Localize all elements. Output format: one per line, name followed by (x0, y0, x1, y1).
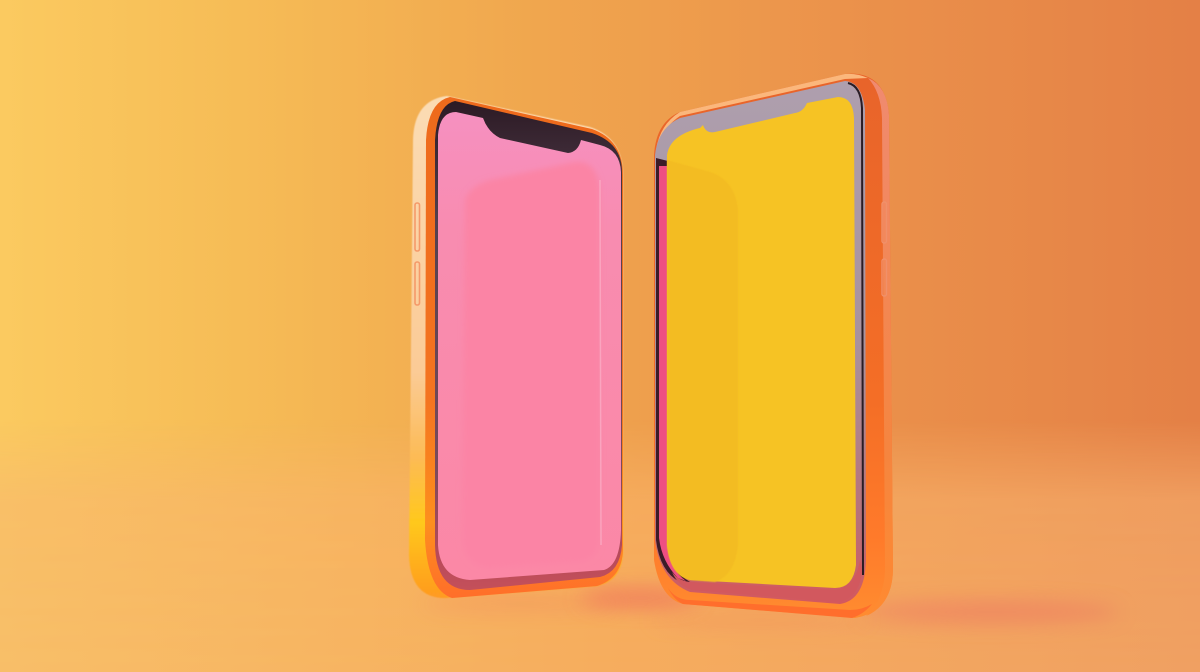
right phone lower red band (672, 560, 862, 602)
left phone body (409, 96, 623, 598)
right phone (654, 74, 893, 618)
right phone bottom rim (668, 588, 872, 618)
right phone top rim (656, 74, 868, 150)
left phone (409, 96, 623, 598)
left phone orange band (425, 97, 623, 598)
left phone inner panel (462, 162, 600, 568)
right phone side buttons (882, 202, 886, 296)
left phone panel highlight (600, 180, 601, 545)
left phone bezel (435, 101, 622, 590)
left phone side buttons (415, 203, 420, 305)
floor shadows (420, 589, 1120, 624)
right phone screen overlay panel (667, 160, 738, 582)
right phone left dark edge (656, 158, 690, 582)
right phone pink strip (659, 166, 686, 581)
left phone pink screen (438, 112, 621, 580)
right phone outer edge highlight (866, 78, 893, 616)
right phone dark inner edge (848, 83, 863, 575)
right phone glass frame (655, 81, 866, 604)
right phone body (654, 74, 893, 618)
right phone yellow screen (667, 97, 856, 588)
floor glow (0, 420, 1200, 672)
